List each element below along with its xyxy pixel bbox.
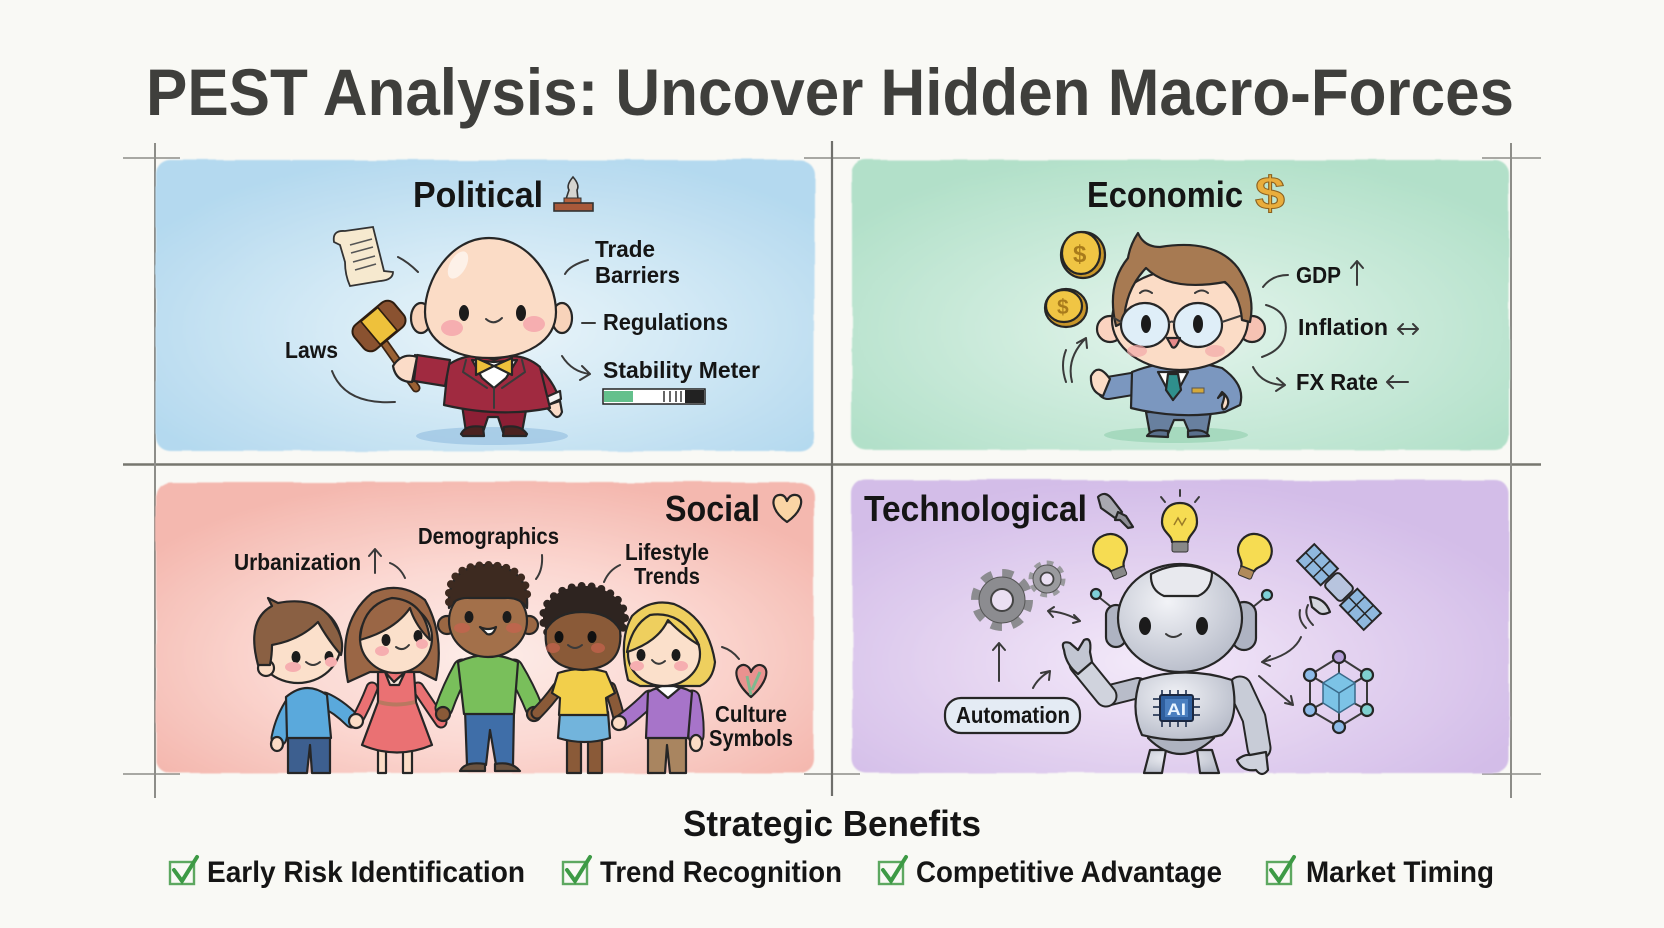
label: culture symbols [709,701,793,751]
figure: politician [349,238,572,445]
automation pill: Automation [956,702,1070,728]
icon: culture heart [736,665,766,697]
curly hair [449,565,527,608]
legs [1144,750,1219,773]
arms [356,688,441,722]
legs [1146,412,1211,434]
label: regulations: Regulations [603,309,728,335]
arms [537,688,620,722]
label: culture symbols: Culture [715,701,787,727]
icon: check 2 [563,857,590,884]
icon: light bulbs [1088,490,1277,583]
clasped hands [349,714,626,730]
face [459,305,469,321]
left arm [1106,688,1138,696]
shirt and tie [1158,372,1188,400]
legs [378,745,412,773]
label: lifestyle trends [625,539,709,589]
face [1112,270,1248,370]
person 5: girl in purple [622,602,715,773]
label: lifestyle trends: Trends [634,563,700,589]
benefits heading: Strategic Benefits [683,803,981,844]
curly hair [543,586,625,650]
icon: check 3 [879,857,906,884]
person 1: boy in blue [254,598,352,773]
ears [411,303,431,333]
coins [1045,232,1105,327]
icon: dollar: $ [1255,167,1285,219]
face [1139,617,1151,635]
right hand [1218,392,1228,409]
head [255,603,341,683]
social background [156,482,814,773]
label: trade barriers: Barriers [595,262,680,288]
label: fx rate: FX Rate [1296,369,1378,395]
technological heading: Technological [864,488,1087,529]
left bulb [1088,529,1137,583]
label: inflation: Inflation [1298,314,1388,340]
connector strokes [1063,275,1288,391]
antennae [1100,598,1264,612]
ai chip [1153,690,1200,727]
ears [1097,316,1123,342]
torso [1135,672,1234,740]
coins: $ [1073,241,1087,268]
left arm and hand [414,355,450,386]
shorts [558,712,610,742]
bow tie [476,358,512,375]
person 3: man in green [436,565,541,771]
label: culture symbols: Symbols [709,725,793,751]
dress [362,672,432,752]
head [425,238,556,358]
label: trade barriers: Trade [595,236,655,262]
shoes [460,763,520,771]
panel: economic [852,160,1509,450]
head [360,603,432,673]
long hair [345,588,439,682]
figure: robot [1063,564,1272,774]
label: gdp: GDP [1296,262,1341,288]
stability meter bar [603,389,705,404]
icon: scroll [334,227,393,286]
eyes [1141,315,1151,333]
jeans [465,710,514,765]
face [628,622,700,686]
label: demographics: Demographics [418,523,559,549]
glasses [1114,303,1240,347]
person 2: girl in red dress [345,588,441,773]
headphones [1106,605,1126,647]
icon: heart [773,495,801,522]
icon: tool [1098,494,1133,528]
section: strategic benefits [170,803,1494,889]
political background [156,160,814,451]
legs [462,405,527,432]
jacket [444,356,550,412]
shoes [461,426,527,436]
left arm and hand [1108,383,1138,388]
right bulb [1228,529,1277,583]
connector strokes [332,257,595,402]
mouth [1167,338,1180,348]
icon: satellite [1297,544,1381,630]
icon: stamp [554,177,593,211]
right arm [534,368,560,408]
arms [622,698,696,736]
right arm [1240,688,1259,748]
benefit: trend recognition: Trend Recognition [600,856,842,889]
icon: check 4 [1267,857,1294,884]
benefit: competitive advantage: Competitive Advantage [916,856,1222,889]
title: PEST Analysis: Uncover Hidden Macro-Forces [146,55,1514,129]
shirt [552,669,615,715]
political heading: Political [413,174,543,215]
social heading: Social [665,488,760,529]
hips [1148,730,1214,754]
arrows [993,607,1301,705]
arms [444,668,534,708]
hair back [624,602,715,686]
icon: gears [975,563,1063,627]
head [1118,564,1242,672]
face [546,612,620,670]
figure: economist [1091,233,1265,443]
connector strokes [390,555,739,659]
torso [646,686,692,738]
icon: network cube [1304,651,1373,733]
technological background [852,480,1509,773]
economic background [852,160,1509,450]
automation pill [945,698,1080,733]
benefit: market timing: Market Timing [1306,856,1494,889]
head [438,616,456,634]
gavel [349,297,416,388]
shadow [416,427,568,445]
label: stability meter: Stability Meter [603,357,760,383]
panel: social [156,482,814,773]
arms [279,700,352,738]
label: lifestyle trends: Lifestyle [625,539,709,565]
shadow [1104,427,1248,443]
benefit: early risk identification: Early Risk Identification [207,856,525,889]
body [1131,362,1241,415]
person 4: child in yellow [537,586,625,773]
torso [458,655,518,714]
trousers [288,735,330,773]
coins: $ [1057,296,1069,319]
ai chip: AI [1167,700,1186,719]
centre bulb [1161,490,1199,552]
legs [567,738,602,773]
panel: political [156,160,814,451]
economic heading: Economic [1087,174,1243,215]
icon: check 1 [170,857,197,884]
label: laws: Laws [285,337,338,363]
hair [1113,233,1252,326]
hair [254,598,342,665]
label: urbanization: Urbanization [234,549,361,575]
panel: technological [852,480,1509,774]
label: trade barriers [595,236,680,288]
trousers [648,736,686,773]
torso [286,688,331,738]
